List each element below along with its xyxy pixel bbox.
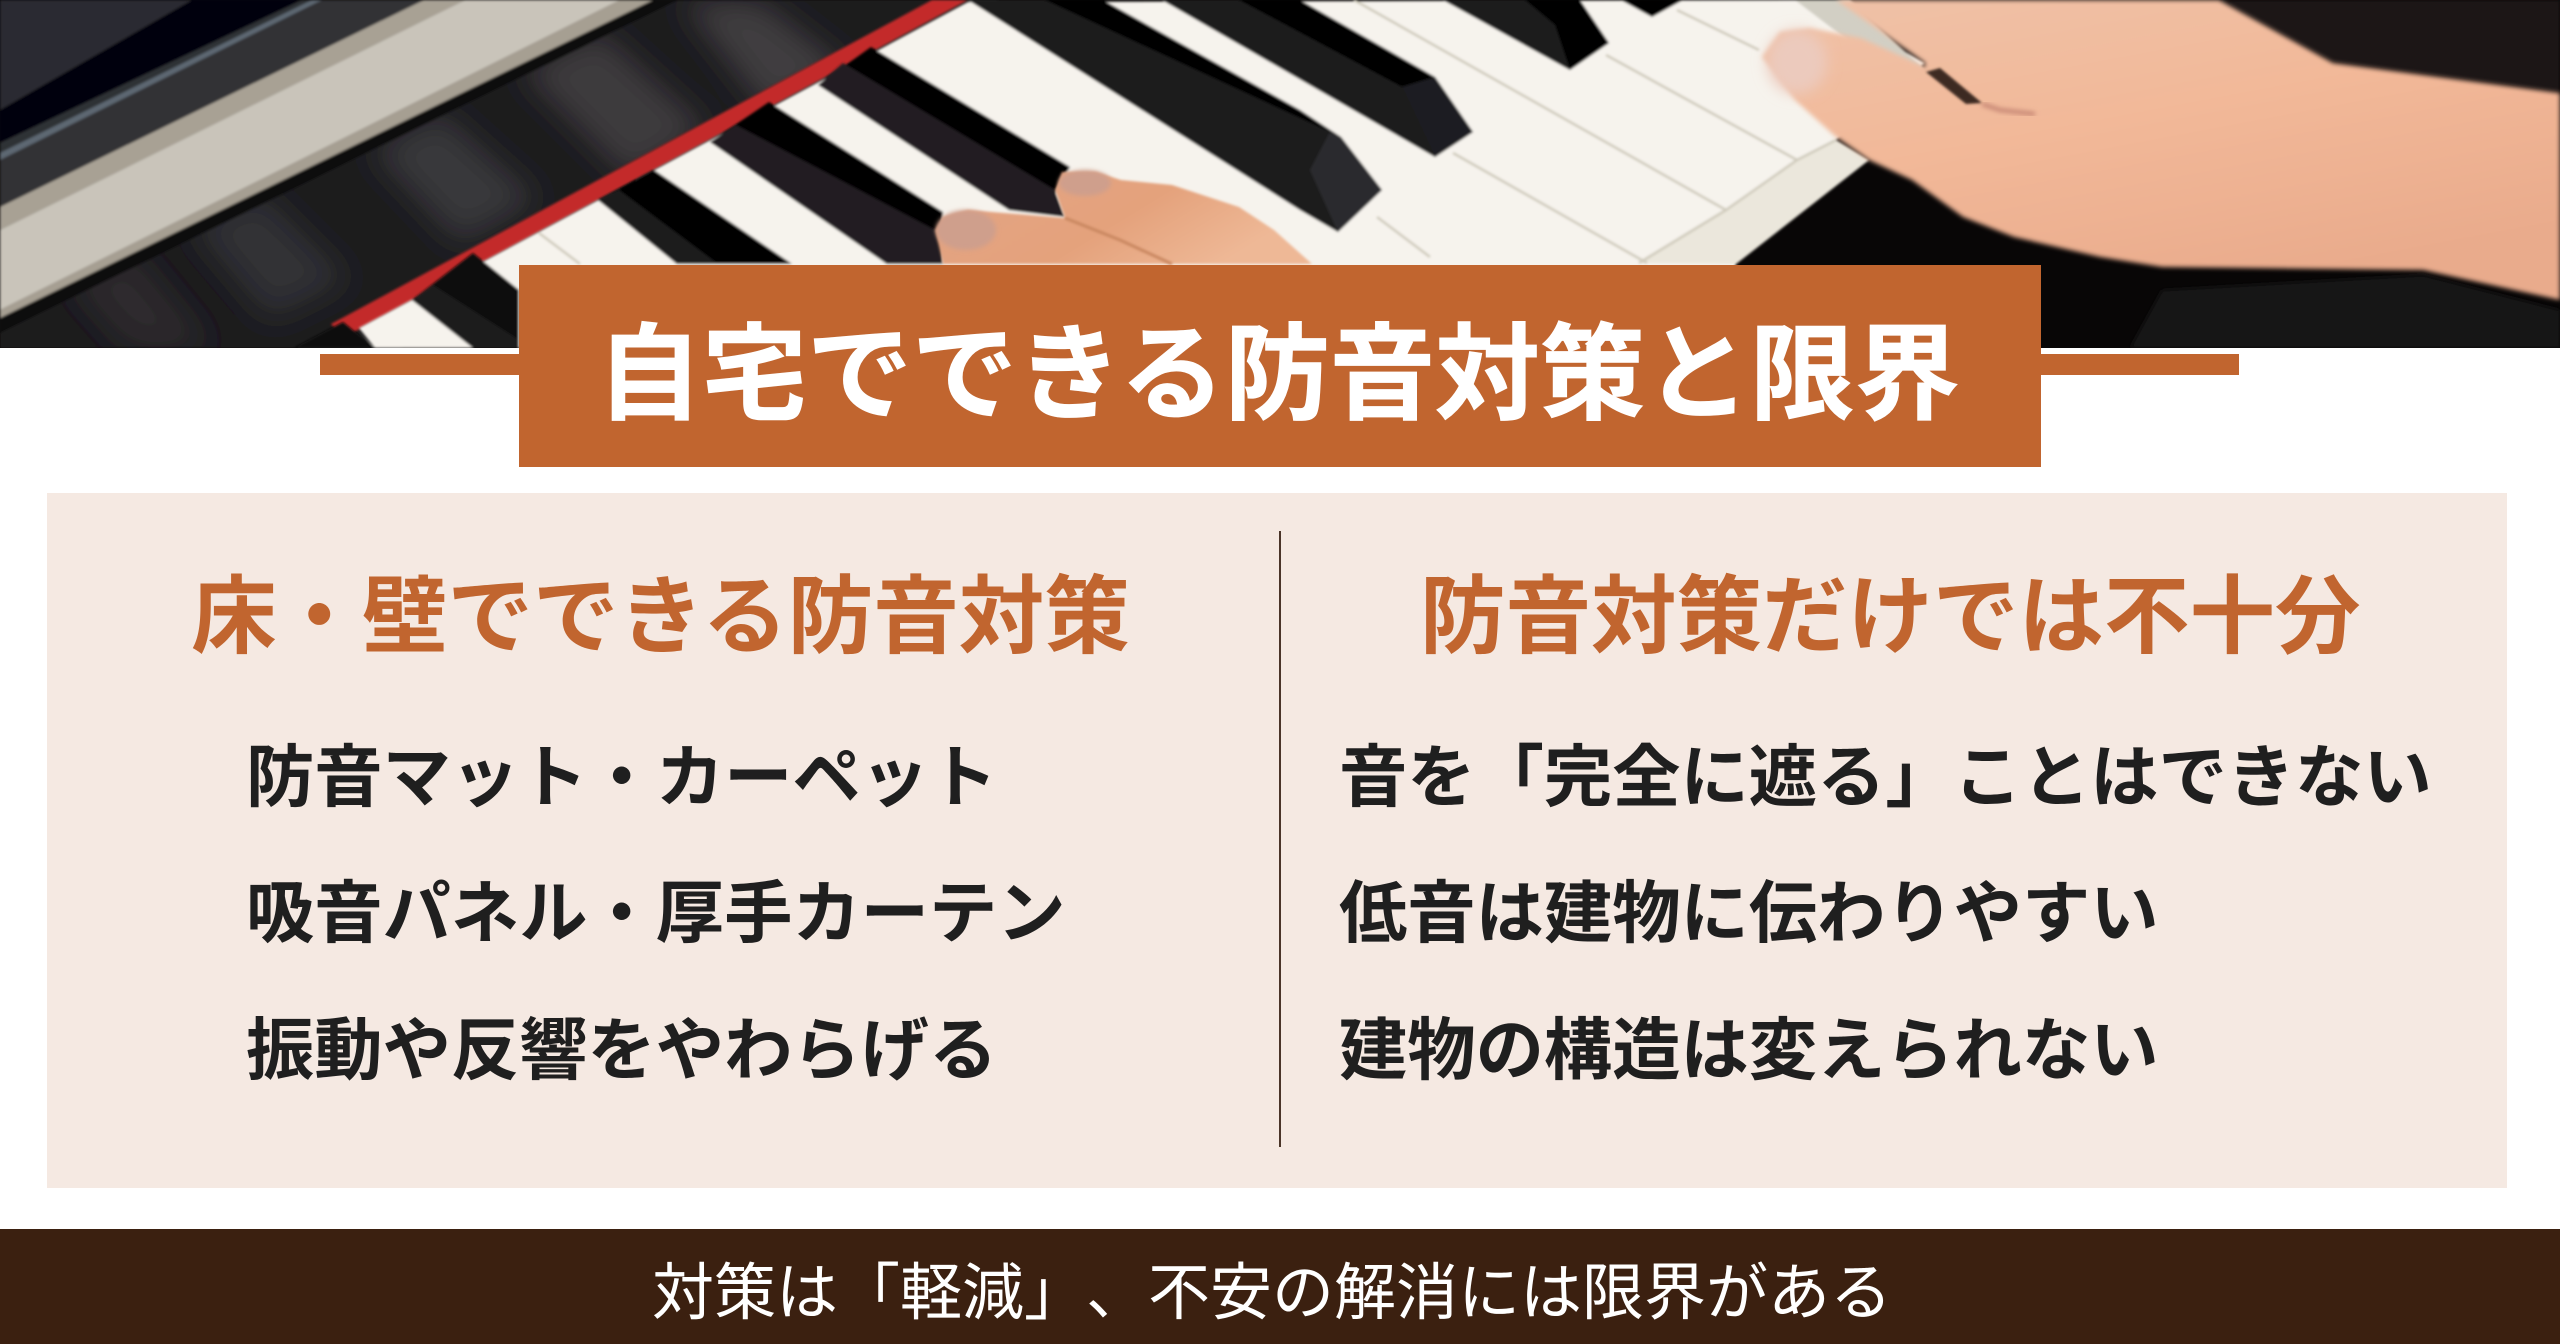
white keys	[359, 0, 1925, 348]
item 1: 防音マット・カーペット	[246, 740, 997, 816]
list: measures	[246, 740, 1066, 1089]
list: limits	[1339, 740, 2432, 1089]
item 2: 吸音パネル・厚手カーテン	[246, 876, 1066, 952]
footer text: 対策は「軽減」、不安の解消には限界がある	[652, 1259, 1892, 1328]
red felt strip	[331, 0, 968, 338]
black keys	[968, 0, 1382, 232]
title banner	[519, 265, 2041, 467]
panel: measures and limits	[47, 493, 2507, 1188]
limit 3: 建物の構造は変えられない	[1339, 1013, 2159, 1089]
footer bar	[0, 1229, 2560, 1344]
title text: 自宅でできる防音対策と限界	[597, 317, 1960, 434]
piano fallboard and cheek	[0, 0, 1000, 348]
panel divider	[1279, 531, 1281, 1147]
item 3: 振動や反響をやわらげる	[246, 1013, 997, 1089]
photo: hands playing piano keys	[0, 0, 2560, 348]
title rules	[320, 354, 2239, 375]
heading: measures are not enough: 防音対策だけでは不十分	[1420, 570, 2360, 665]
limit 2: 低音は建物に伝わりやすい	[1339, 876, 2159, 952]
piano keys	[294, 0, 1925, 348]
heading: floor and wall measures: 床・壁でできる防音対策	[191, 570, 1130, 665]
limit 1: 音を「完全に遮る」ことはできない	[1339, 740, 2432, 816]
left hand fingers	[935, 170, 1312, 264]
right hand	[1762, 0, 2560, 348]
